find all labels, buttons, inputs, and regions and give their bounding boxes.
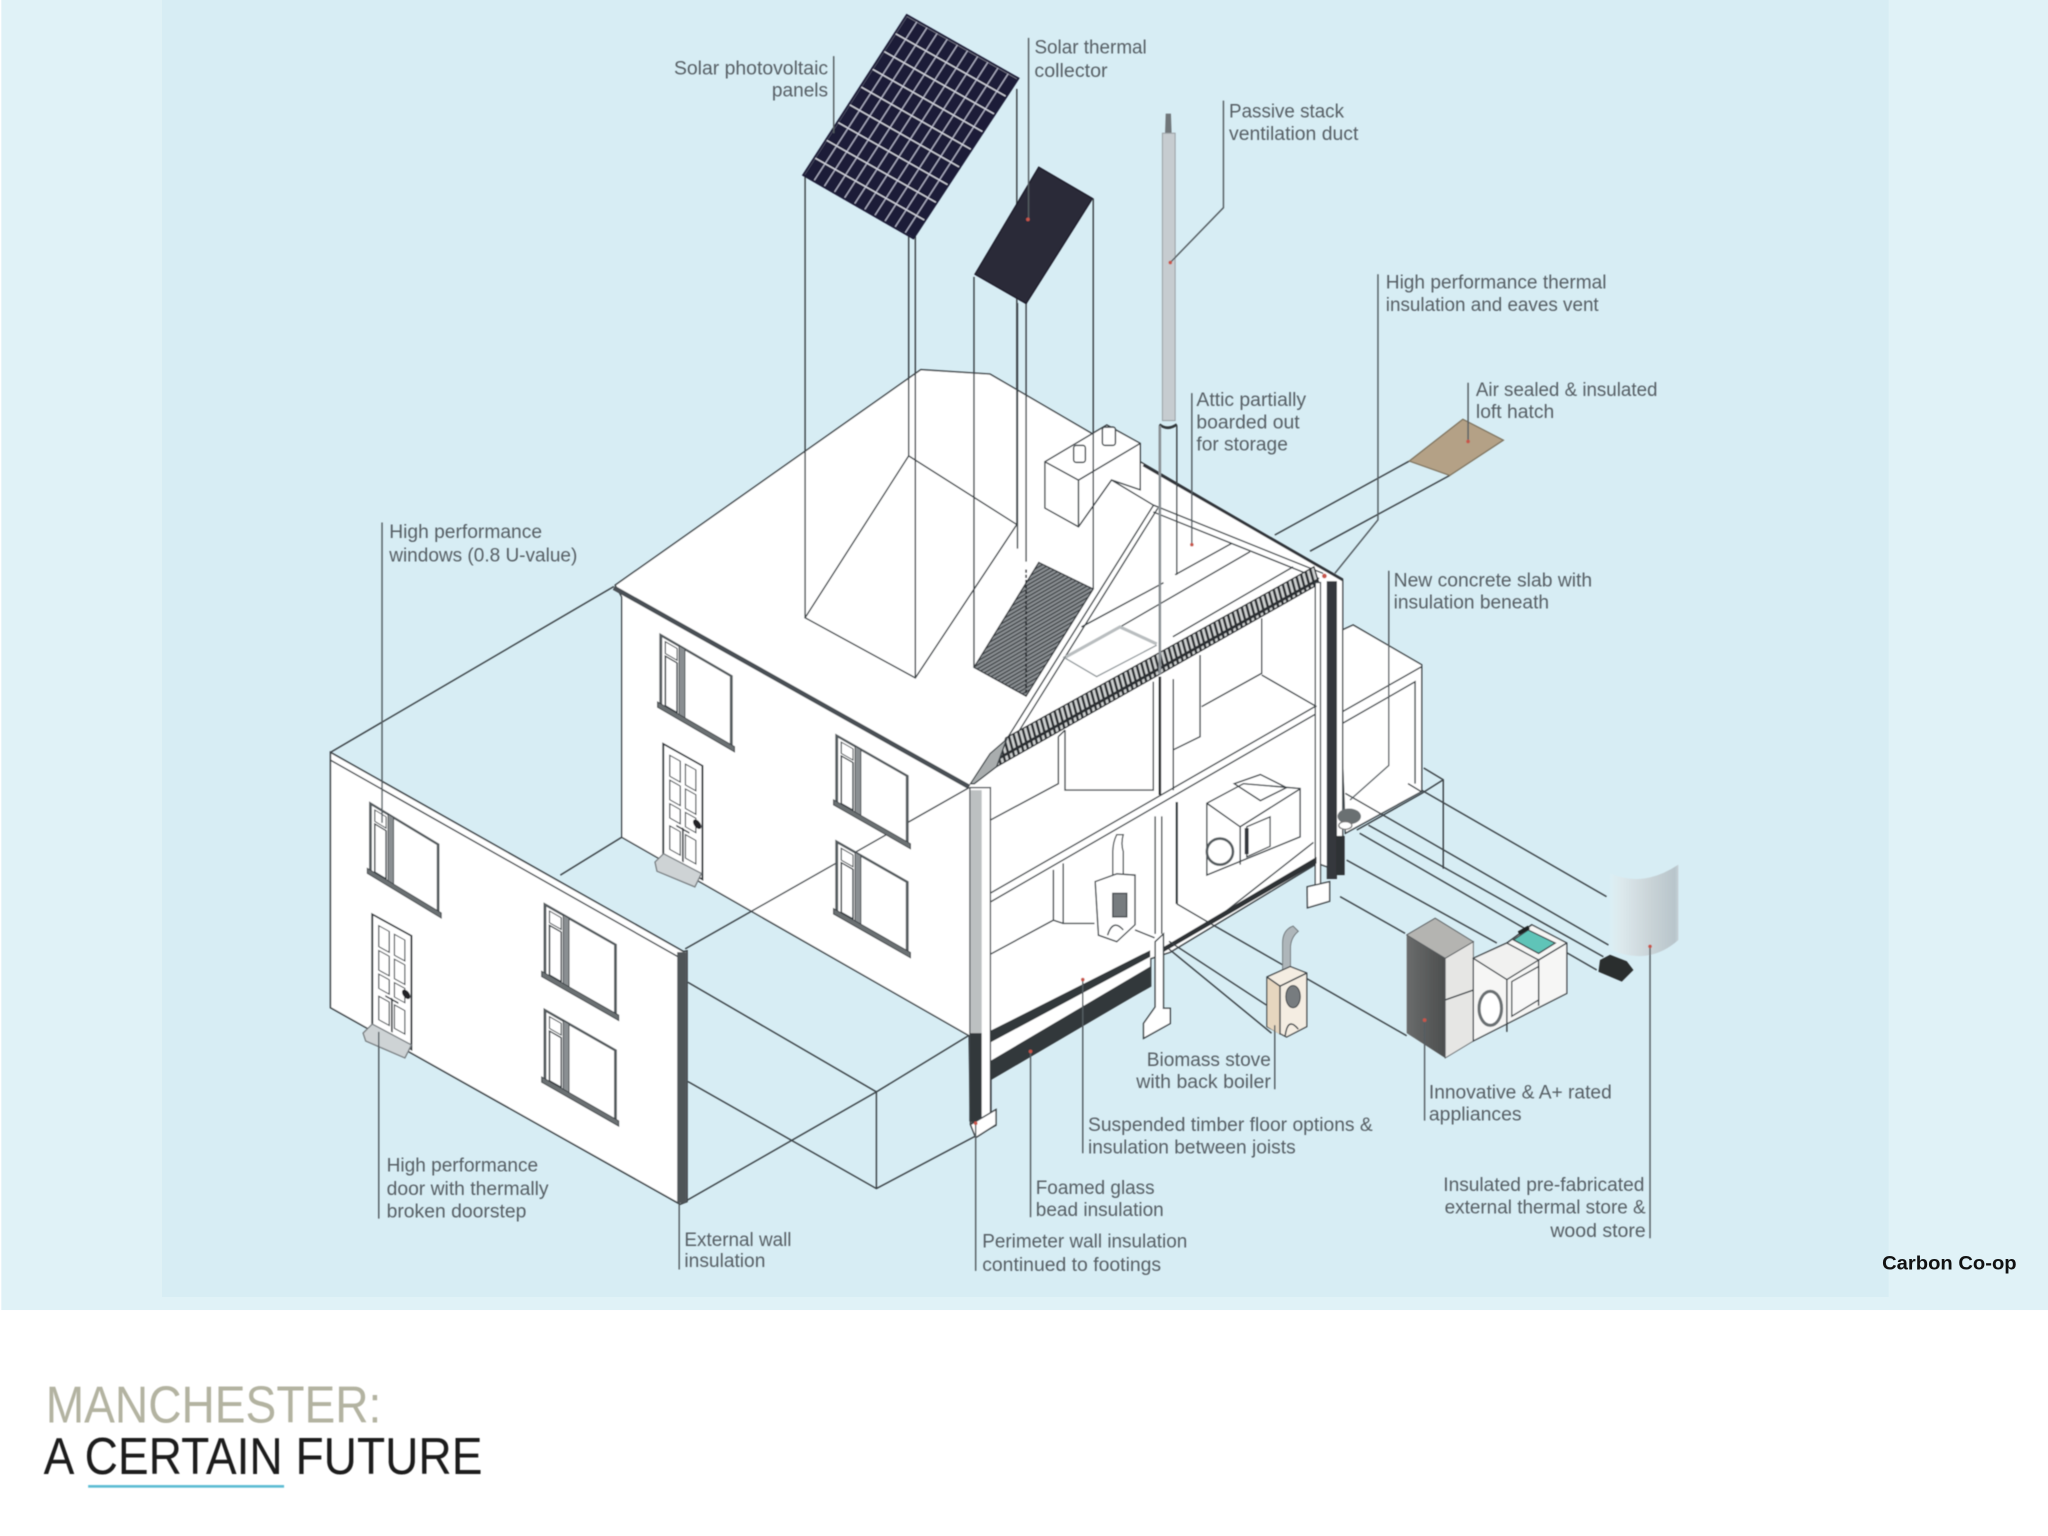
flue bbox=[1283, 926, 1298, 970]
upper right room bbox=[1173, 618, 1317, 750]
label: passive stack ventilation duct: ventilation duct bbox=[1229, 124, 1359, 145]
doorstep: main house bbox=[655, 854, 701, 887]
label: foamed glass bead: bead insulation bbox=[1036, 1200, 1164, 1221]
label: perimeter wall insulation: continued to footings bbox=[982, 1255, 1161, 1276]
label: foamed glass bead: Foamed glass bbox=[1036, 1178, 1155, 1199]
label: perimeter wall insulation: Perimeter wall insulation bbox=[982, 1231, 1187, 1252]
label: solar thermal collector: Solar thermal bbox=[1034, 38, 1147, 59]
loft hatch bbox=[1275, 419, 1503, 551]
leader lines bbox=[379, 38, 1650, 1271]
label: thermal store: wood store bbox=[1549, 1221, 1646, 1242]
label: thermal store bbox=[1443, 1175, 1646, 1242]
label: thermal insulation and eaves vent: High performance thermal bbox=[1386, 273, 1607, 294]
window: foreground wall upper left bbox=[367, 802, 441, 918]
label: solar thermal collector: collector bbox=[1034, 61, 1108, 82]
label: door: door with thermally bbox=[387, 1179, 549, 1200]
lower left room bbox=[991, 863, 1155, 954]
window: foreground wall lower right bbox=[542, 1008, 619, 1126]
appliances: fridge, washing machine and sink bbox=[1407, 918, 1567, 1058]
window: main house lower right bbox=[833, 840, 910, 958]
biomass stove with back boiler bbox=[1267, 926, 1307, 1037]
centre partition wall bbox=[1155, 677, 1177, 934]
washer porthole bbox=[1479, 991, 1502, 1025]
label: foamed glass bead bbox=[1036, 1178, 1164, 1221]
label: suspended timber floor: Suspended timber floor options & bbox=[1088, 1115, 1373, 1136]
diagram: exploded house drawing bbox=[44, 15, 1678, 1488]
label: windows: windows (0.8 U-value) bbox=[388, 546, 577, 567]
external thermal store cylinder bbox=[1610, 865, 1678, 956]
label: solar photovoltaic panels bbox=[674, 58, 828, 102]
logo line two: A CERTAIN FUTURE bbox=[44, 1428, 482, 1486]
label: perimeter wall insulation bbox=[982, 1231, 1187, 1276]
gable corner band bbox=[970, 739, 1007, 784]
label: thermal store: external thermal store & bbox=[1445, 1197, 1646, 1218]
roof ridge and eaves bbox=[1143, 465, 1343, 580]
wood store bbox=[1598, 955, 1633, 982]
label: suspended timber floor bbox=[1088, 1115, 1373, 1158]
rear floor insulation strip bbox=[1163, 857, 1317, 952]
right section wall bbox=[1315, 581, 1345, 891]
biomass stove inside house bbox=[1095, 835, 1135, 942]
label: loft hatch bbox=[1476, 380, 1657, 423]
label: concrete slab bbox=[1394, 570, 1592, 614]
sink bbox=[1514, 930, 1555, 953]
doorstep: foreground wall bbox=[363, 1024, 411, 1058]
timber floor insulation strip bbox=[991, 950, 1150, 1042]
label: solar thermal collector bbox=[1034, 38, 1147, 82]
dormer roof edges bbox=[1078, 480, 1323, 579]
label: thermal insulation and eaves vent bbox=[1386, 273, 1607, 316]
label: solar photovoltaic panels: panels bbox=[772, 81, 828, 102]
label: external wall insulation: insulation bbox=[684, 1251, 765, 1272]
label: biomass stove bbox=[1135, 1050, 1271, 1093]
rear extension and concrete slab bbox=[1337, 625, 1443, 869]
left footing bbox=[970, 1110, 996, 1138]
foamed glass bead insulation strip bbox=[991, 967, 1150, 1080]
fridge right face bbox=[1445, 942, 1473, 1058]
red leader dots bbox=[974, 218, 1652, 1125]
fridge left face bbox=[1407, 935, 1445, 1058]
label: attic: boarded out bbox=[1196, 412, 1300, 433]
solar thermal dashed line over hatch bbox=[1025, 569, 1027, 696]
label: biomass stove: with back boiler bbox=[1135, 1072, 1271, 1093]
extension inner lines and slab bbox=[1337, 667, 1443, 869]
credit: Carbon Co-op: Carbon Co-op bbox=[1882, 1254, 2017, 1275]
central footing bbox=[1144, 934, 1170, 1038]
fridge top bbox=[1407, 918, 1473, 958]
label: windows: High performance bbox=[389, 522, 542, 543]
loft skylight opening bbox=[1063, 627, 1157, 677]
label: loft hatch: loft hatch bbox=[1476, 402, 1554, 423]
passive stack ventilation duct bbox=[1159, 114, 1177, 674]
left section wall bbox=[970, 788, 990, 1122]
label: door: High performance bbox=[387, 1156, 538, 1177]
solar array projection lines and roof footprint bbox=[805, 89, 1017, 678]
oven door bbox=[1512, 967, 1539, 1016]
site outline and ground lines bbox=[330, 586, 996, 1204]
door: main house bbox=[663, 744, 702, 879]
roof and gable lines bbox=[1007, 505, 1158, 742]
house white mass bbox=[615, 370, 1343, 1123]
label: windows bbox=[388, 522, 577, 567]
main house bbox=[614, 370, 1345, 1138]
logo line one: MANCHESTER: bbox=[46, 1376, 381, 1434]
window: foreground wall upper right bbox=[542, 903, 619, 1021]
window: main house upper left bbox=[658, 633, 735, 752]
label: loft hatch: Air sealed & insulated bbox=[1476, 380, 1657, 401]
roof insulation band bbox=[997, 567, 1319, 767]
insulation edge strip bbox=[677, 952, 686, 1203]
label: passive stack ventilation duct bbox=[1229, 102, 1359, 145]
chimney bbox=[1045, 425, 1140, 527]
boiler pipework at wall bbox=[1337, 808, 1361, 829]
label: thermal insulation and eaves vent: insulation and eaves vent bbox=[1386, 295, 1599, 316]
label: passive stack ventilation duct: Passive stack bbox=[1229, 102, 1345, 123]
right footing bbox=[1307, 882, 1330, 908]
label: biomass stove: Biomass stove bbox=[1147, 1050, 1271, 1071]
first floor slab bbox=[991, 707, 1315, 902]
label: concrete slab: insulation beneath bbox=[1394, 593, 1549, 614]
attic floor lines bbox=[1081, 543, 1293, 637]
fridge door handle line bbox=[1445, 990, 1473, 1000]
foreground wall with external insulation bbox=[330, 752, 969, 1204]
label: door bbox=[387, 1156, 549, 1222]
label: external wall insulation: External wall bbox=[684, 1230, 792, 1251]
washing machine and worktop inside house bbox=[1207, 775, 1300, 875]
pipes to thermal store, stove and appliances bbox=[1169, 790, 1608, 1036]
solar thermal collector panel bbox=[975, 167, 1092, 304]
logo underline bbox=[88, 1485, 284, 1488]
extension body bbox=[1337, 625, 1422, 833]
door: foreground wall bbox=[372, 914, 411, 1049]
logo: Manchester: A Certain Future bbox=[44, 1376, 482, 1488]
label: appliances: Innovative & A+ rated bbox=[1429, 1082, 1612, 1103]
solar thermal footprint hatch bbox=[974, 562, 1093, 696]
label: attic: Attic partially bbox=[1196, 390, 1307, 411]
label: concrete slab: New concrete slab with bbox=[1394, 570, 1592, 591]
label: appliances: appliances bbox=[1429, 1105, 1522, 1126]
label: appliances bbox=[1429, 1082, 1612, 1126]
lower right room floor bbox=[1177, 842, 1313, 923]
label: attic: for storage bbox=[1196, 435, 1288, 456]
label: thermal store: Insulated pre-fabricated bbox=[1443, 1175, 1644, 1196]
label: external wall insulation bbox=[684, 1230, 792, 1272]
washer and worktop unit bbox=[1473, 925, 1567, 1041]
stove body bbox=[1267, 967, 1307, 1037]
upper left room bbox=[990, 682, 1153, 820]
label: suspended timber floor: insulation between joists bbox=[1088, 1137, 1296, 1158]
tap bbox=[1518, 926, 1530, 935]
label: attic bbox=[1196, 390, 1307, 456]
solar photovoltaic panel bbox=[803, 15, 1018, 238]
label: door: broken doorstep bbox=[387, 1201, 526, 1222]
window: main house upper right bbox=[833, 734, 910, 849]
label: solar photovoltaic panels: Solar photovoltaic bbox=[674, 58, 828, 79]
background: inner blue panel bbox=[162, 0, 1889, 1297]
solar thermal projection lines bbox=[974, 199, 1093, 667]
